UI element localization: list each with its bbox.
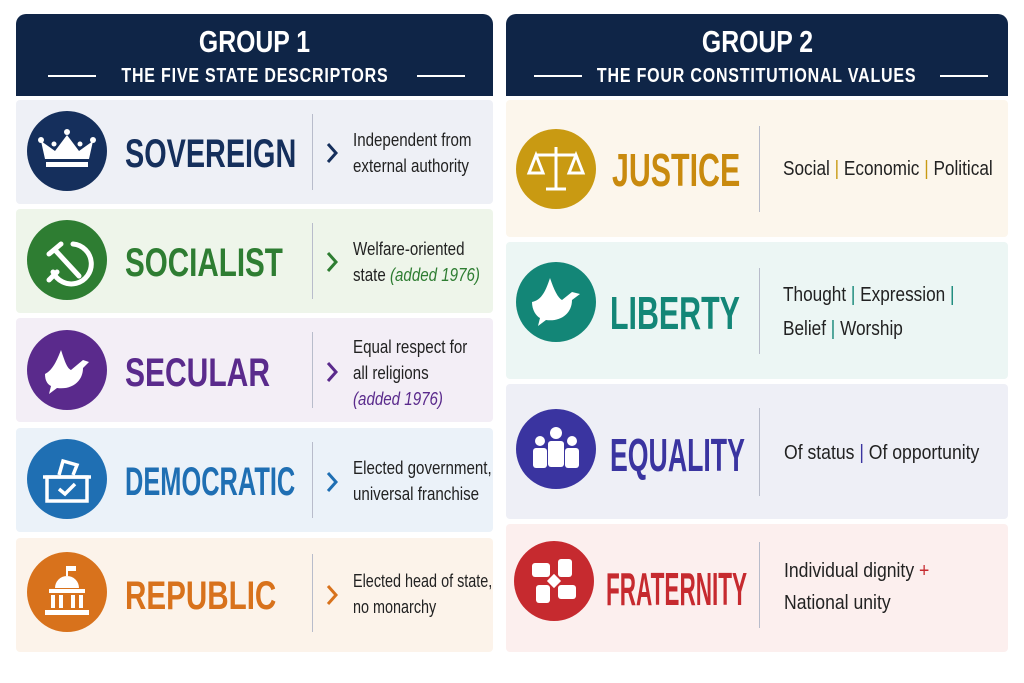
icon: ballot box	[27, 439, 107, 519]
title: SOVEREIGN	[125, 132, 296, 176]
row: socialist	[16, 209, 493, 313]
description	[353, 571, 492, 617]
description: National unity	[784, 592, 891, 614]
title: SECULAR	[125, 351, 270, 395]
title: REPUBLIC	[125, 574, 276, 618]
description: all religions	[353, 363, 429, 383]
description: Independent from	[353, 130, 472, 150]
description: external authority	[353, 156, 469, 176]
description: Welfare-oriented	[353, 239, 464, 259]
chevron	[327, 585, 338, 605]
chevron	[327, 362, 338, 382]
description	[353, 239, 480, 285]
title: FRATERNITY	[606, 563, 747, 615]
description: no monarchy	[353, 597, 436, 617]
row: republic	[16, 538, 493, 652]
panel: group 1 header	[16, 14, 493, 96]
chevron	[327, 252, 338, 272]
chevron	[327, 472, 338, 492]
title: SOCIALIST	[125, 241, 283, 285]
icon: people	[516, 409, 596, 489]
title: EQUALITY	[610, 429, 745, 481]
row: fraternity	[506, 524, 1008, 652]
row: democratic	[16, 428, 493, 532]
description: Thought | Expression |	[783, 284, 955, 306]
description	[784, 560, 929, 614]
icon: dove	[27, 330, 107, 410]
description: universal franchise	[353, 484, 479, 504]
title: DEMOCRATIC	[125, 460, 295, 504]
description: (added 1976)	[353, 389, 443, 409]
panel: group 2 header	[506, 14, 1008, 96]
icon: dove	[516, 262, 596, 342]
row: sovereign	[16, 100, 493, 204]
icon: crown	[27, 111, 107, 191]
description: Elected head of state,	[353, 571, 492, 591]
description	[353, 130, 472, 176]
description: Belief | Worship	[783, 318, 903, 340]
description: Elected government,	[353, 458, 492, 478]
icon: capitol building	[27, 552, 107, 632]
description: state (added 1976)	[353, 265, 480, 285]
icon: scales	[516, 129, 596, 209]
heading: group 2: GROUP 2	[701, 24, 813, 59]
row: equality	[506, 384, 1008, 519]
description	[783, 284, 955, 340]
description: Social | Economic | Political	[783, 158, 993, 180]
icon: hammer and sickle	[27, 220, 107, 300]
icon: joined hands	[514, 541, 594, 621]
title: LIBERTY	[610, 287, 740, 339]
row: justice	[506, 100, 1008, 237]
row: liberty	[506, 242, 1008, 379]
title: JUSTICE	[612, 144, 740, 196]
description	[353, 458, 492, 504]
chevron	[327, 143, 338, 163]
description: Equal respect for	[353, 337, 467, 357]
description: Of status | Of opportunity	[784, 442, 979, 464]
description	[353, 337, 468, 409]
subheading: four constitutional values: THE FOUR CONSTITUTIONAL VALUES	[597, 65, 917, 87]
description: Individual dignity +	[784, 560, 929, 582]
row: secular	[16, 318, 493, 422]
heading: group 1: GROUP 1	[199, 24, 310, 59]
subheading: five state descriptors: THE FIVE STATE DESCRIPTORS	[121, 65, 388, 87]
